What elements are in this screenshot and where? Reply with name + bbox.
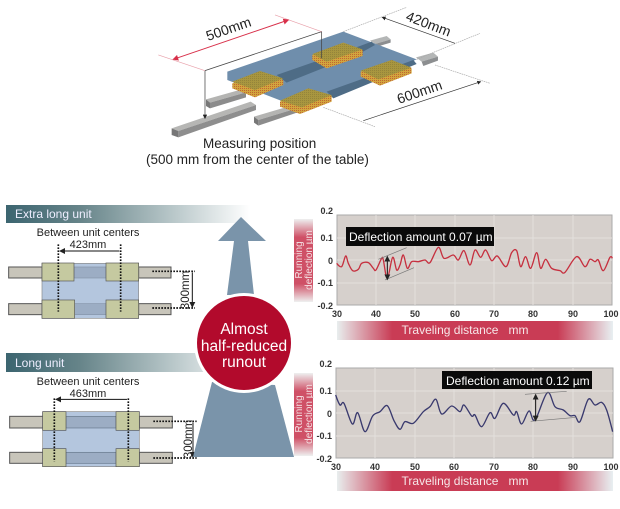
heading: long unit (6, 353, 250, 372)
y axis labels: -0.2 (316, 454, 332, 464)
schematic shapes (9, 244, 195, 318)
label: 423mm: 423mm (70, 239, 106, 251)
label: 463mm: 463mm (70, 388, 106, 400)
y axis labels: 0 (327, 409, 332, 419)
badge: almost half-reduced runout: runout (222, 354, 267, 371)
table assembly (158, 7, 490, 137)
plot background (336, 368, 613, 458)
callout: Deflection amount 0.07 µm (349, 230, 493, 244)
arrow base (193, 382, 294, 457)
y axis labels: -0.1 (317, 278, 333, 288)
y axis title: deflection µm (304, 384, 315, 444)
x axis labels: 50 (410, 309, 420, 319)
y axis labels: 0 (328, 256, 333, 266)
x axis labels: 70 (489, 462, 499, 472)
x axis labels: 30 (331, 462, 341, 472)
x axis labels: 40 (371, 309, 381, 319)
heading: extra long unit (6, 205, 250, 223)
table plate (227, 32, 417, 107)
data line (337, 247, 612, 280)
schematic: extra long unit (9, 227, 195, 318)
dimension label: 420mm: 420mm (404, 8, 453, 40)
x axis labels: 100 (603, 462, 619, 472)
y axis labels: 0.2 (319, 359, 332, 369)
label: between unit centers: Between unit centers (37, 376, 140, 388)
3D table diagram (146, 7, 490, 167)
y axis title: Running (294, 241, 305, 279)
heading: long unit: Long unit (15, 356, 65, 370)
label: 300mm long unit: 300mm (183, 420, 195, 458)
chart: extra long unit deflection (294, 206, 619, 340)
rails (206, 89, 246, 103)
data line (336, 391, 613, 432)
callout: Deflection amount 0.12 µm (446, 374, 590, 388)
y axis title: Running (294, 395, 305, 433)
y axis labels: 0.2 (320, 206, 333, 216)
x axis labels: 100 (603, 309, 619, 319)
dimension label: 500mm: 500mm (204, 14, 253, 44)
y axis labels: -0.2 (317, 301, 333, 311)
measuring position caption: (500 mm from the center of the table) (146, 152, 369, 167)
dimension label: 600mm: 600mm (395, 77, 444, 107)
x axis labels: 70 (489, 309, 499, 319)
y axis title (294, 219, 315, 302)
y axis labels: 0.1 (319, 386, 332, 396)
chart: long unit deflection (294, 359, 619, 491)
badge: almost half-reduced runout: half-reduced (201, 338, 287, 355)
badge: almost half-reduced runout (194, 293, 294, 393)
x axis labels: 80 (528, 309, 538, 319)
schematic shapes (10, 398, 197, 467)
y axis title: deflection µm (304, 230, 315, 290)
improvement arrow and badge (183, 217, 294, 458)
arrow (218, 217, 266, 295)
x axis labels: 80 (528, 462, 538, 472)
carriage blocks (232, 72, 283, 97)
y axis labels: -0.1 (316, 431, 332, 441)
x axis labels: 50 (410, 462, 420, 472)
x axis labels: 40 (370, 462, 380, 472)
x axis title: Traveling distance mm (402, 474, 528, 488)
badge: almost half-reduced runout: Almost (220, 321, 268, 338)
plot background (337, 215, 612, 305)
label: between unit centers: Between unit centers (37, 227, 140, 239)
x axis labels: 90 (568, 462, 578, 472)
y axis labels: 0.1 (320, 233, 333, 243)
measuring bar (172, 102, 256, 131)
x axis labels: 30 (332, 309, 342, 319)
x axis labels: 90 (568, 309, 578, 319)
label: 300mm: 300mm (180, 271, 192, 309)
schematic: long unit (10, 376, 197, 467)
y axis title (294, 373, 315, 456)
heading: extra long unit: Extra long unit (15, 207, 92, 221)
x axis labels: 60 (449, 462, 459, 472)
x axis title: Traveling distance mm (402, 323, 528, 337)
x axis labels: 60 (450, 309, 460, 319)
x axis title (337, 321, 613, 340)
x axis title (337, 471, 613, 491)
dimension lines (205, 32, 322, 118)
measuring position caption: Measuring position (203, 136, 316, 151)
